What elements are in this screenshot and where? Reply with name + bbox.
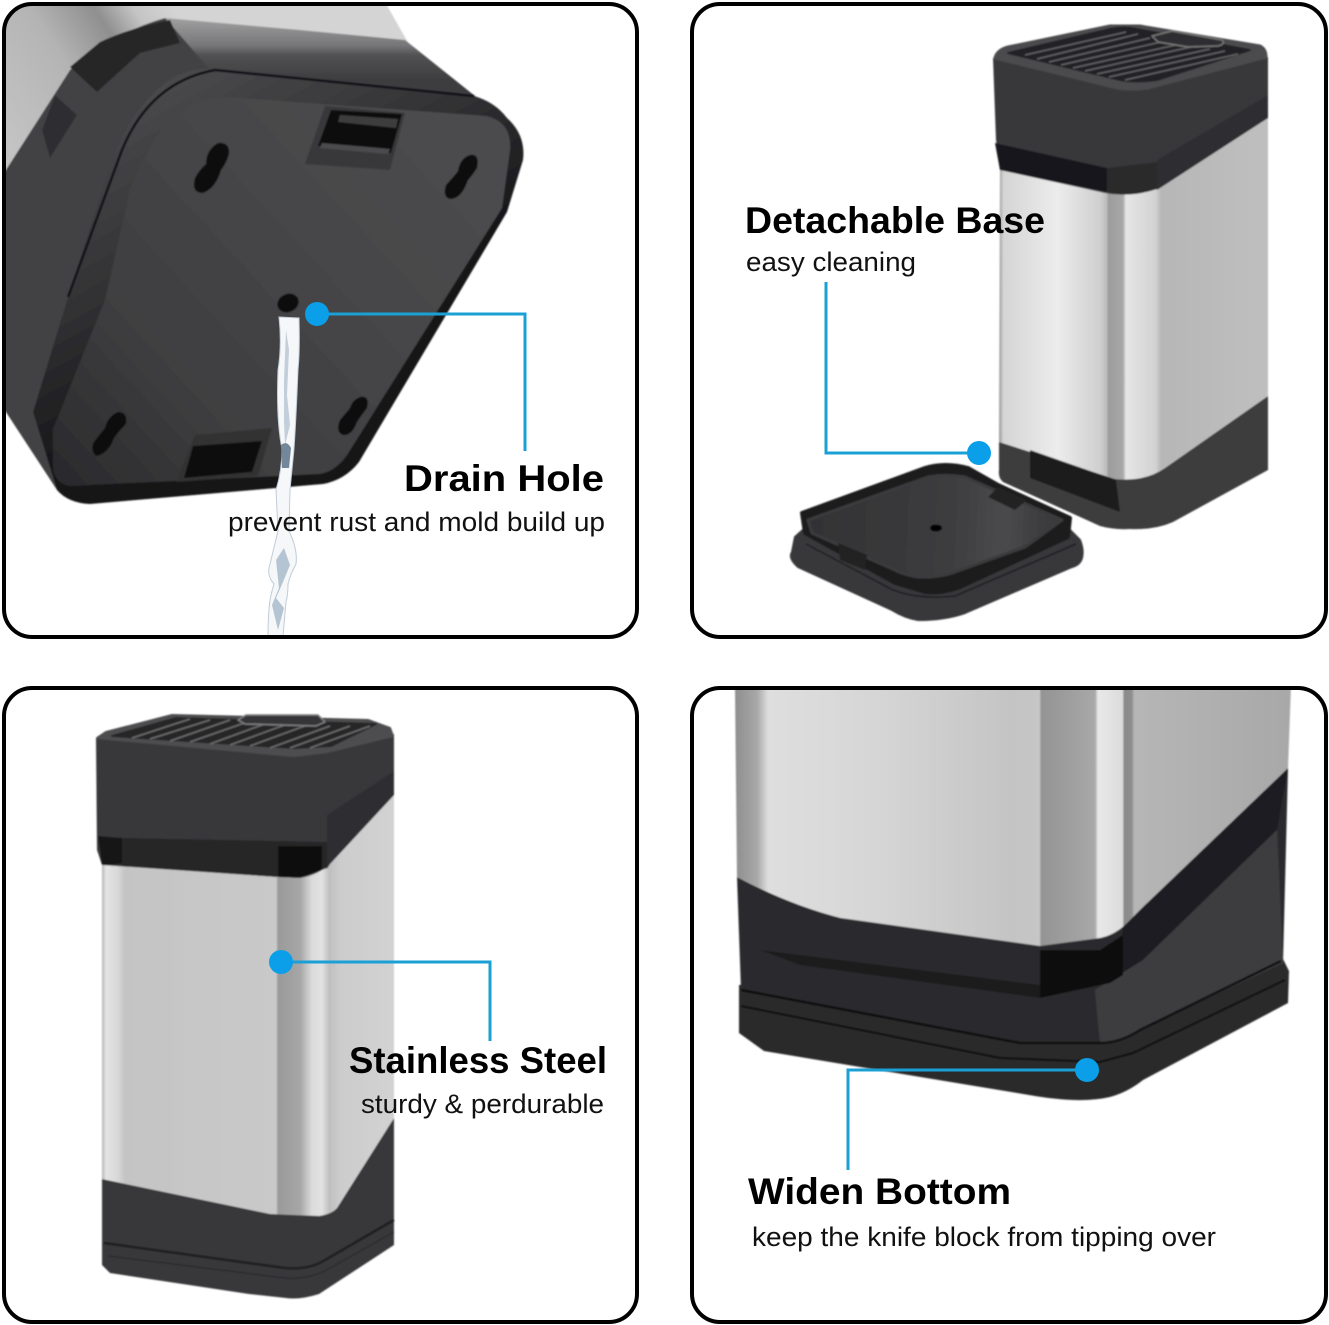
callout: detachable base leader	[826, 282, 991, 465]
product: top rim and knife slots	[995, 26, 1266, 89]
panel: stainless steel	[4, 688, 637, 1322]
text: widen bottom description: keep the knife block from tipping over	[752, 1222, 1216, 1252]
panel: widen bottom	[692, 686, 1326, 1322]
callout: widen bottom leader	[848, 1058, 1099, 1170]
panel: detachable base	[692, 4, 1326, 637]
product: steel body from below	[2, 2, 410, 176]
product: top collar band	[164, 17, 476, 98]
product: bottom base	[102, 1118, 394, 1298]
product: top collar	[96, 734, 394, 878]
product: detached tray	[791, 465, 1083, 620]
product: top rim and knife slots	[97, 715, 393, 756]
product: dark collar patch	[70, 20, 180, 92]
product: bottom base	[999, 396, 1268, 529]
callout: stainless steel leader	[269, 950, 490, 1041]
product: black lower band	[737, 768, 1288, 1043]
product: black collar side	[2, 18, 212, 490]
text: drain hole description: prevent rust and mold build up	[228, 507, 605, 537]
icon: water stream	[268, 317, 299, 636]
callout: drain hole leader	[305, 302, 525, 451]
icon: keyhole slots	[92, 143, 478, 456]
icon: mounting clip top	[305, 106, 405, 170]
icon: drain hole	[277, 293, 300, 313]
product: base underside inner face	[53, 97, 510, 486]
product: steel body	[999, 100, 1268, 480]
product: crease line	[68, 70, 474, 297]
product: steel body close-up	[735, 686, 1291, 946]
heading: stainless steel: Stainless Steel	[349, 1040, 607, 1081]
product: widened base flange	[739, 955, 1289, 1100]
heading: drain hole: Drain Hole	[404, 458, 604, 499]
heading: detachable base: Detachable Base	[745, 200, 1045, 241]
text: stainless steel description: sturdy & perdurable	[361, 1089, 604, 1119]
panel: drain hole	[2, 2, 637, 637]
product: base underside outer	[33, 69, 523, 504]
product: steel body	[102, 780, 394, 1216]
icon: mounting clip bottom	[176, 428, 272, 482]
text: detachable base description: easy cleaning	[746, 247, 916, 277]
heading: widen bottom: Widen Bottom	[748, 1171, 1011, 1212]
product: top collar	[993, 57, 1268, 195]
